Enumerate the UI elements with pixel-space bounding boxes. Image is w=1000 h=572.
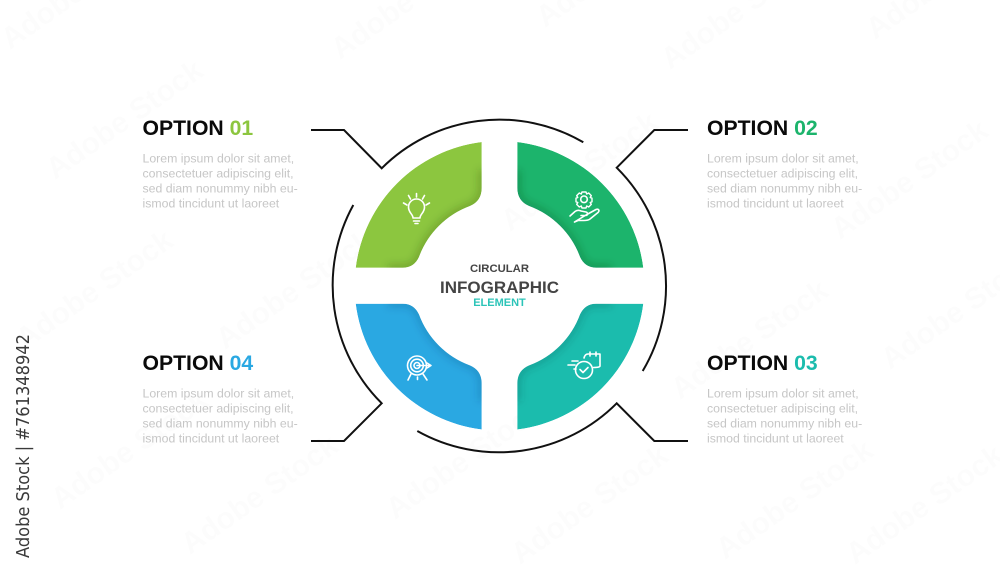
text block: option 01: Lorem ipsum dolor sit amet,: [142, 152, 294, 166]
text block: option 04: Lorem ipsum dolor sit amet,: [142, 386, 294, 400]
watermark pattern: Adobe Stock: [10, 223, 179, 356]
stock id side text: Adobe Stock | #761348942: [14, 334, 34, 558]
text block: option 02: [707, 117, 862, 210]
segment: blue bottom-left: [356, 304, 482, 430]
text block: option 03: Lorem ipsum dolor sit amet,: [707, 386, 859, 400]
center title: circular: CIRCULAR: [470, 263, 529, 275]
segment: green top-left: [356, 142, 482, 268]
watermark pattern: Adobe Stock: [380, 393, 549, 526]
icon: gear on open hand: [570, 192, 599, 222]
text block: option 02: Lorem ipsum dolor sit amet,: [707, 152, 859, 166]
segment: emerald top-right: [517, 142, 643, 268]
text block: option 02: sed diam nonummy nibh eu-: [707, 182, 862, 196]
watermark pattern: Adobe Stock: [505, 438, 674, 571]
center title: infographic: INFOGRAPHIC: [440, 278, 559, 297]
text block: option 01: OPTION 01: [142, 117, 253, 140]
text block: option 04: [142, 352, 298, 446]
watermark pattern: Adobe Stock: [495, 105, 664, 238]
connector ring: option 01 line and top arc: [311, 120, 583, 168]
icon: light bulb: [404, 194, 430, 224]
connector ring: option 03 line and bottom arc: [417, 403, 688, 452]
watermark pattern: Adobe Stock: [210, 223, 379, 356]
text block: option 04: OPTION 04: [142, 352, 253, 375]
watermark pattern: Adobe Stock: [665, 273, 834, 406]
text block: option 03: consectetuer adipiscing elit,: [707, 402, 858, 416]
watermark pattern: Adobe Stock: [45, 383, 214, 516]
text block: option 04: ismod tincidunt ut laoreet: [142, 432, 280, 446]
icon: target with arrow: [408, 356, 431, 380]
text block: option 04: sed diam nonummy nibh eu-: [142, 416, 298, 430]
text block: option 01: [142, 117, 298, 210]
text block: option 02: ismod tincidunt ut laoreet: [707, 196, 844, 210]
segment: teal bottom-right: [517, 304, 643, 430]
text block: option 02: OPTION 02: [707, 117, 818, 140]
icon: calendar and clock with check: [568, 352, 600, 378]
watermark pattern: Adobe Stock: [175, 428, 344, 561]
text block: option 03: ismod tincidunt ut laoreet: [707, 432, 844, 446]
connector ring: option 04 line and left arc: [311, 205, 382, 441]
watermark pattern: Adobe Stock: [710, 433, 879, 566]
text block: option 04: consectetuer adipiscing elit,: [142, 402, 294, 416]
connector ring: option 02 line and right arc: [617, 130, 688, 371]
text block: option 01: consectetuer adipiscing elit,: [142, 166, 294, 180]
text block: option 01: ismod tincidunt ut laoreet: [142, 196, 280, 210]
text block: option 02: consectetuer adipiscing elit,: [707, 166, 858, 180]
watermark pattern: Adobe Stock: [40, 53, 209, 186]
text block: option 03: OPTION 03: [707, 352, 818, 375]
center title: element: ELEMENT: [473, 297, 526, 309]
text block: option 03: [707, 352, 862, 446]
text block: option 01: sed diam nonummy nibh eu-: [142, 182, 298, 196]
watermark pattern: Adobe Stock: [825, 113, 994, 246]
text block: option 03: sed diam nonummy nibh eu-: [707, 416, 862, 430]
